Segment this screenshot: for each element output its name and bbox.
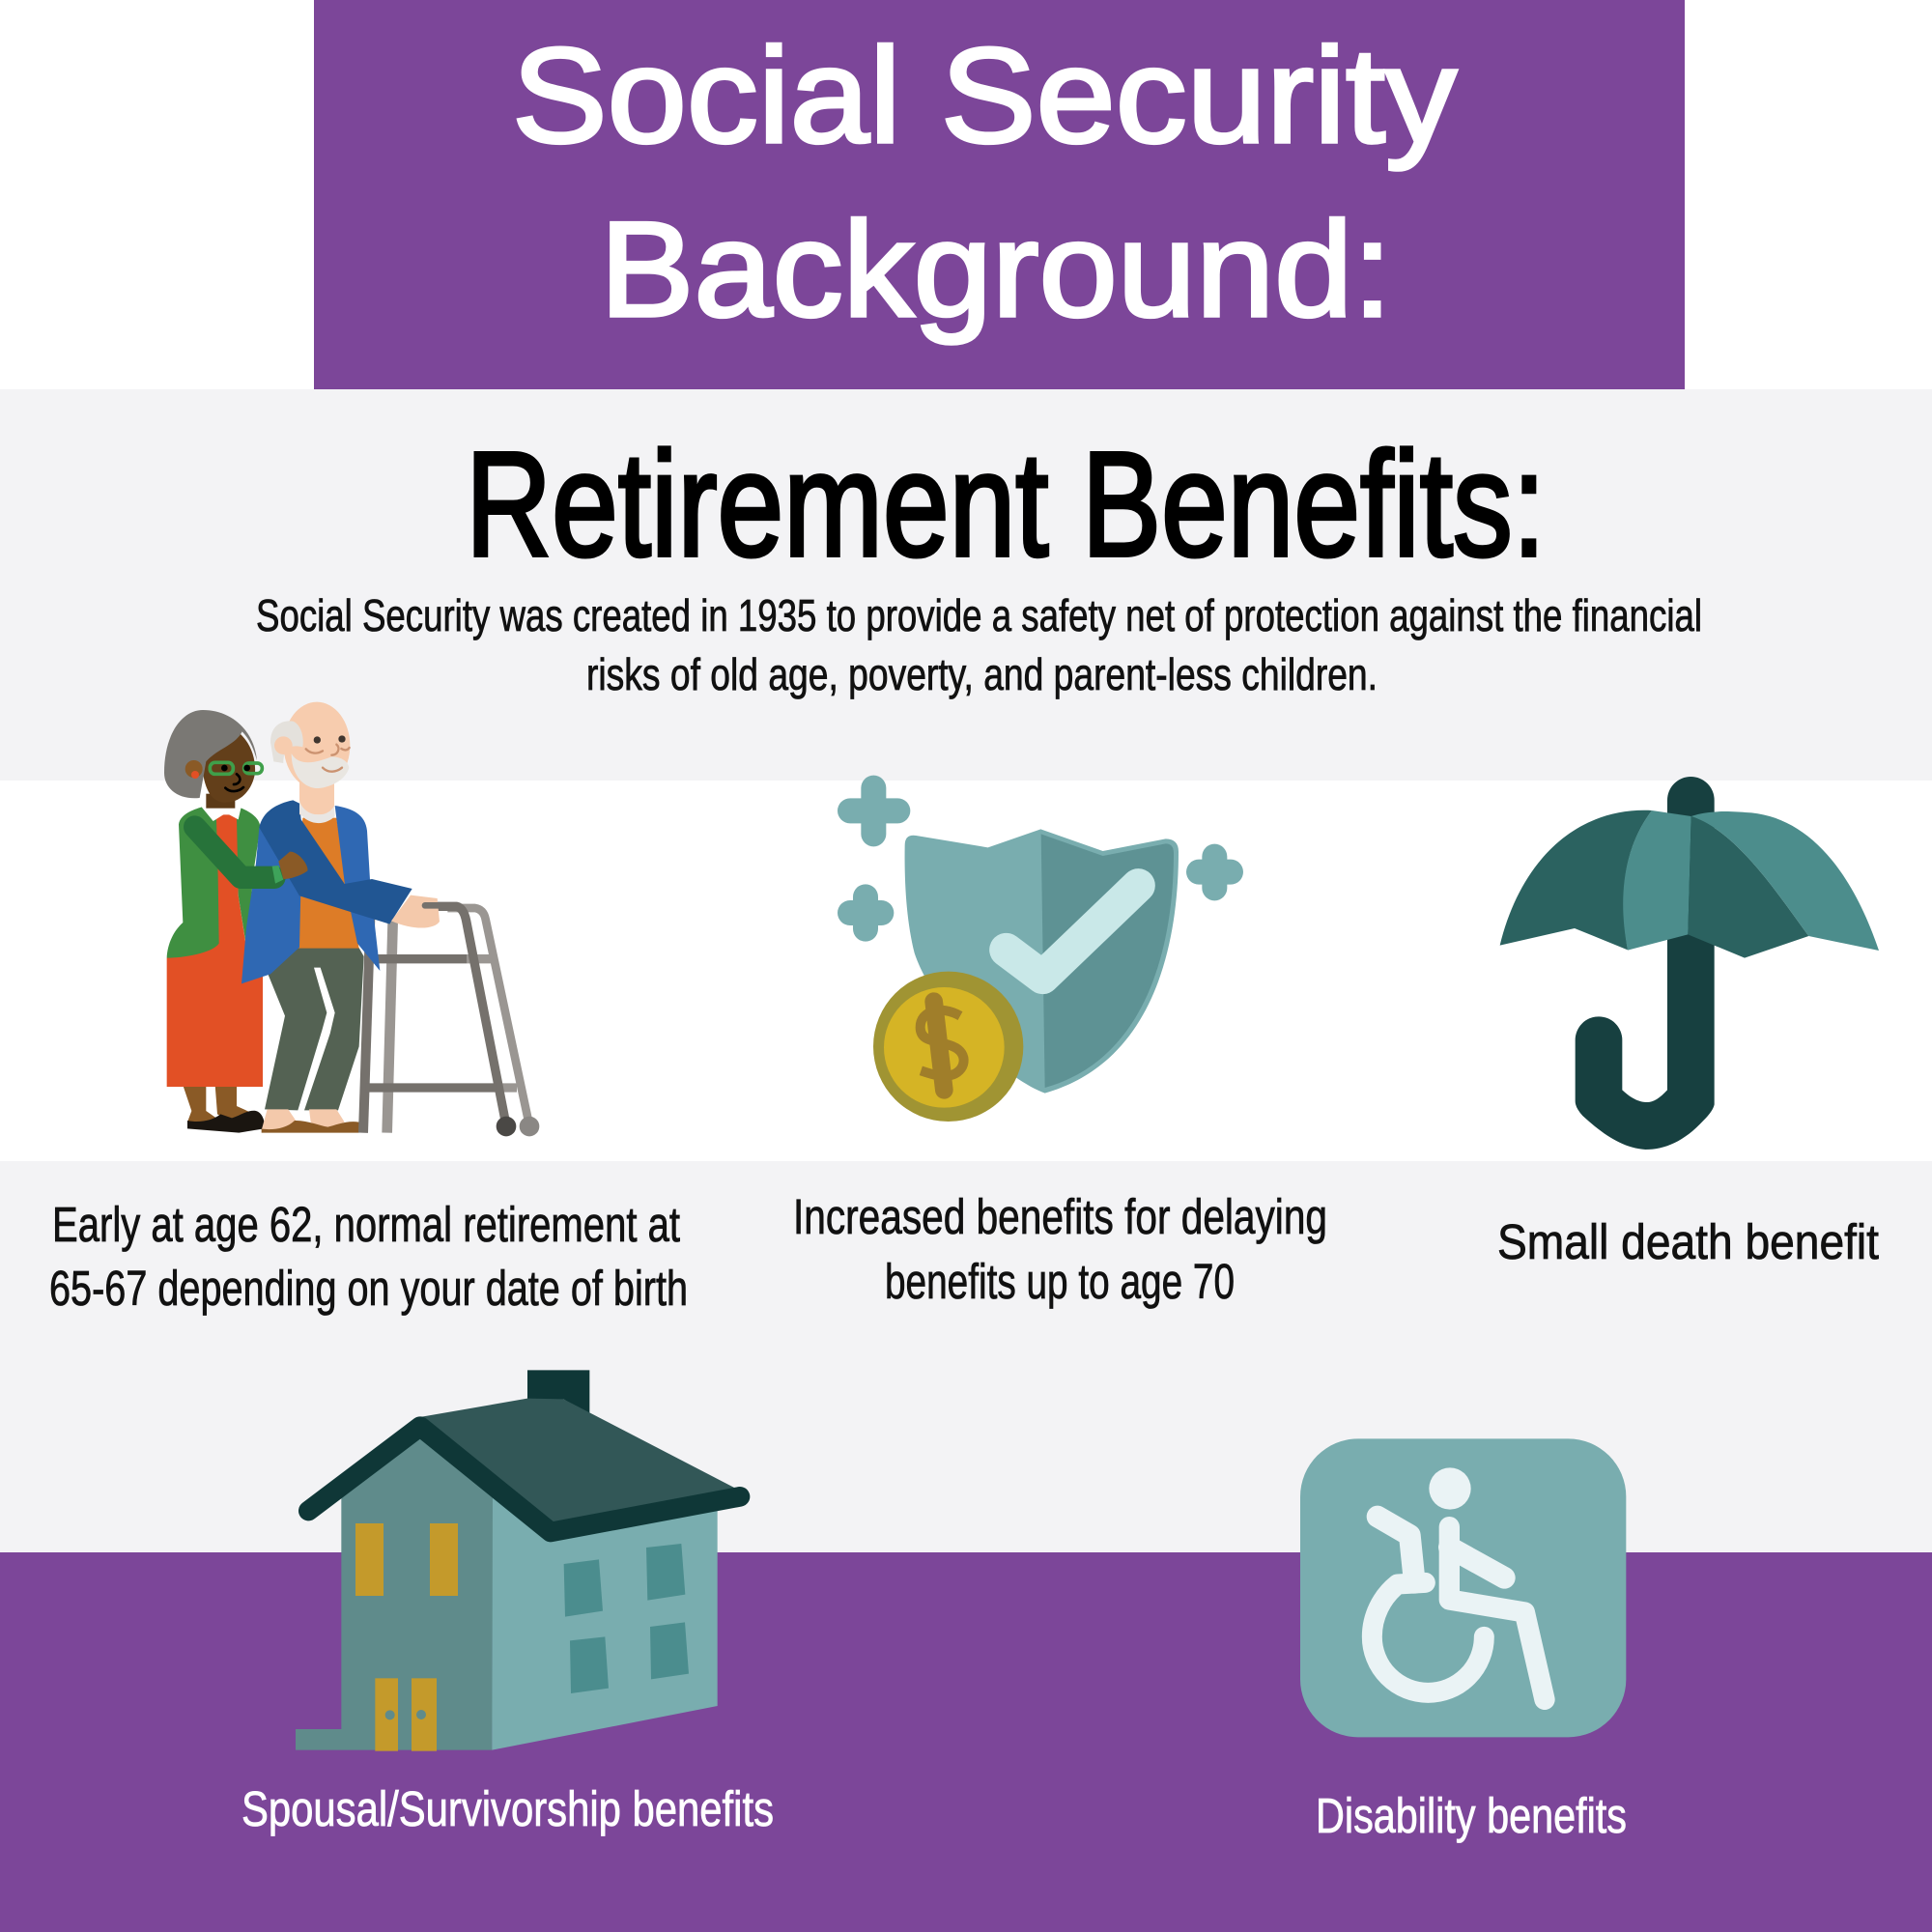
walker grip [425, 895, 447, 915]
icon: house [296, 1370, 740, 1751]
walker front frame [363, 906, 506, 1133]
plus sparkle, top left [850, 788, 897, 834]
wheelchair backrest [1378, 1517, 1414, 1582]
icon: umbrella [1500, 777, 1879, 1150]
front windows [355, 1523, 458, 1596]
title line 2: Background: [600, 193, 1392, 345]
roof [422, 1399, 737, 1523]
intro line 2: risks of old age, poverty, and parent-less children. [586, 649, 1378, 699]
intro paragraph [256, 590, 1702, 699]
woman dress [167, 814, 263, 1087]
man hair and ear [270, 721, 303, 763]
woman arm [195, 827, 274, 877]
house side wall [492, 1494, 718, 1750]
woman collar [201, 803, 242, 821]
caption: early retirement [49, 1197, 688, 1316]
woman cuff [272, 866, 283, 884]
icon: wheelchair [1300, 1438, 1626, 1737]
caption line 1: Early at age 62, normal retirement at [52, 1197, 680, 1252]
chimney [527, 1370, 589, 1415]
umbrella handle [1576, 777, 1715, 1150]
background band: lower gray section [0, 1161, 1932, 1552]
woman legs [183, 1085, 254, 1122]
walker rear frame [387, 908, 529, 1133]
caption line 2: 65-67 depending on your date of birth [49, 1261, 688, 1316]
caption line 1: Increased benefits for delaying [793, 1189, 1327, 1244]
double door [375, 1678, 437, 1751]
background band: bottom purple section [0, 1552, 1932, 1932]
house front wall [296, 1427, 494, 1750]
man eyes and smile [306, 735, 350, 772]
icon: elderly couple with walker [164, 702, 539, 1136]
caption: spousal benefits: Spousal/Survivorship benefits [242, 1781, 774, 1836]
canopy right panel [1691, 811, 1879, 951]
roof edge [308, 1427, 740, 1532]
icon: shield with check mark and coin [850, 788, 1231, 1122]
woman hand [278, 852, 308, 879]
canopy left panel [1500, 810, 1652, 950]
man beard [292, 753, 349, 788]
woman hair [164, 710, 257, 798]
caption: delayed benefits [793, 1189, 1327, 1309]
heading: retirement benefits: Retirement Benefits: [466, 421, 1546, 587]
plus sparkle, lower left [850, 896, 881, 929]
woman face [201, 731, 255, 803]
plus sparkle, right [1199, 857, 1231, 888]
man shoes [262, 1121, 359, 1133]
man feet [262, 1109, 345, 1130]
woman eyes, nose, mouth [221, 765, 250, 791]
woman glasses [210, 762, 262, 774]
wheelchair user head [1429, 1467, 1471, 1510]
background band: top gray section [0, 389, 1932, 781]
title banner [314, 0, 1685, 389]
shield dark side [1041, 834, 1174, 1088]
coin [873, 972, 1023, 1122]
man sweater [298, 818, 359, 949]
caption line 2: benefits up to age 70 [885, 1254, 1235, 1309]
man sleeve [259, 800, 412, 924]
man head [284, 702, 350, 789]
woman neck [206, 794, 235, 809]
shield light side [905, 829, 1179, 1094]
side windows [564, 1544, 689, 1693]
check mark [1007, 886, 1138, 978]
rounded tile [1300, 1438, 1626, 1737]
woman shoes [187, 1111, 265, 1133]
title line 1: Social Security [512, 19, 1457, 171]
caption: disability benefits: Disability benefits [1316, 1788, 1627, 1843]
caption: small death benefit: Small death benefit [1497, 1214, 1879, 1269]
canopy centre-left panel [1623, 810, 1691, 951]
wheel [1372, 1582, 1484, 1692]
woman ear and earring [185, 760, 203, 779]
canopy centre-right panel [1688, 816, 1808, 958]
wheelchair user arm [1449, 1548, 1504, 1577]
man hand [391, 895, 440, 928]
walker front wheel [497, 1117, 516, 1136]
wheelchair user body and leg [1449, 1527, 1545, 1699]
man trousers [265, 945, 364, 1110]
man neck and collar [299, 782, 335, 823]
man jacket [242, 806, 380, 983]
walker rear wheel [520, 1117, 539, 1136]
woman cardigan [167, 807, 260, 958]
